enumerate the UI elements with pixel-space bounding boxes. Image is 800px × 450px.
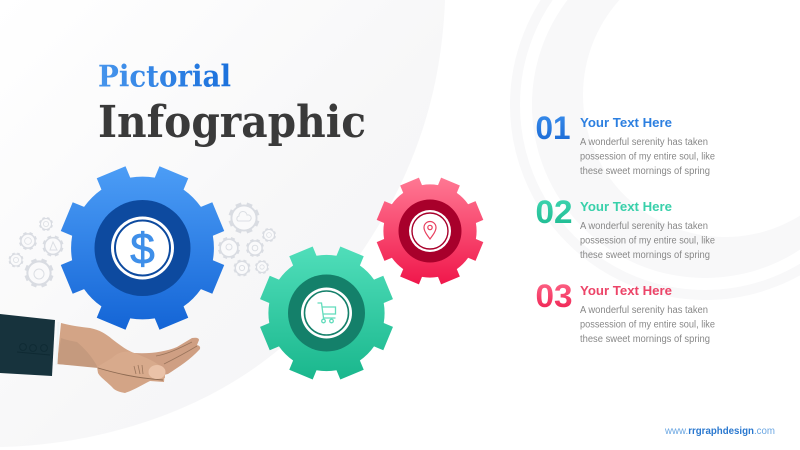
- heading 3: Your Text Here: [580, 283, 672, 298]
- fingers behind: [134, 338, 200, 378]
- icon: dollar sign: $: [130, 224, 155, 274]
- shirt cuff: [56, 322, 58, 365]
- small grey gears left: [9, 217, 63, 287]
- body text 2: [580, 221, 715, 261]
- body text 2: A wonderful serenity has taken: [580, 221, 708, 232]
- background rings: [515, 0, 800, 295]
- hand holding gear: [0, 314, 200, 393]
- blue gear: [61, 166, 224, 330]
- list item 2: [536, 194, 715, 261]
- wrist shadow: [57, 338, 98, 368]
- body text 1: A wonderful serenity has taken: [580, 137, 708, 148]
- number 02: 02: [536, 194, 572, 230]
- number 01: 01: [536, 110, 570, 146]
- number 03: 03: [536, 278, 572, 314]
- body text 1: [580, 137, 715, 177]
- body text 1: these sweet mornings of spring: [580, 166, 710, 177]
- thumbnail: [148, 365, 166, 379]
- body text 3: A wonderful serenity has taken: [580, 305, 708, 316]
- body text 1: possession of my entire soul, like: [580, 152, 715, 162]
- list item 1: [536, 110, 715, 177]
- title line: Infographic: Infographic: [98, 97, 366, 148]
- body text 2: possession of my entire soul, like: [580, 236, 715, 246]
- list item 3: [536, 278, 715, 345]
- body text 3: these sweet mornings of spring: [580, 334, 710, 345]
- thumb: [97, 352, 165, 380]
- body text 3: possession of my entire soul, like: [580, 320, 715, 330]
- icon: map pin: [424, 222, 436, 239]
- heading 2: Your Text Here: [580, 199, 672, 214]
- body text 3: [580, 305, 715, 345]
- title line: Pictorial: Pictorial: [98, 60, 231, 94]
- body text 2: these sweet mornings of spring: [580, 250, 710, 261]
- icon: shopping cart: [318, 303, 336, 323]
- back of hand: [57, 323, 165, 393]
- title: [98, 60, 366, 148]
- sleeve: [0, 314, 55, 376]
- red gear: [377, 178, 483, 284]
- small grey gears right: [218, 203, 276, 276]
- heading 1: Your Text Here: [580, 115, 672, 130]
- sleeve buttons: [17, 344, 50, 355]
- background blob: [0, 0, 445, 447]
- footer website: www.rrgraphdesign.com: [664, 426, 775, 437]
- green gear: [260, 247, 393, 379]
